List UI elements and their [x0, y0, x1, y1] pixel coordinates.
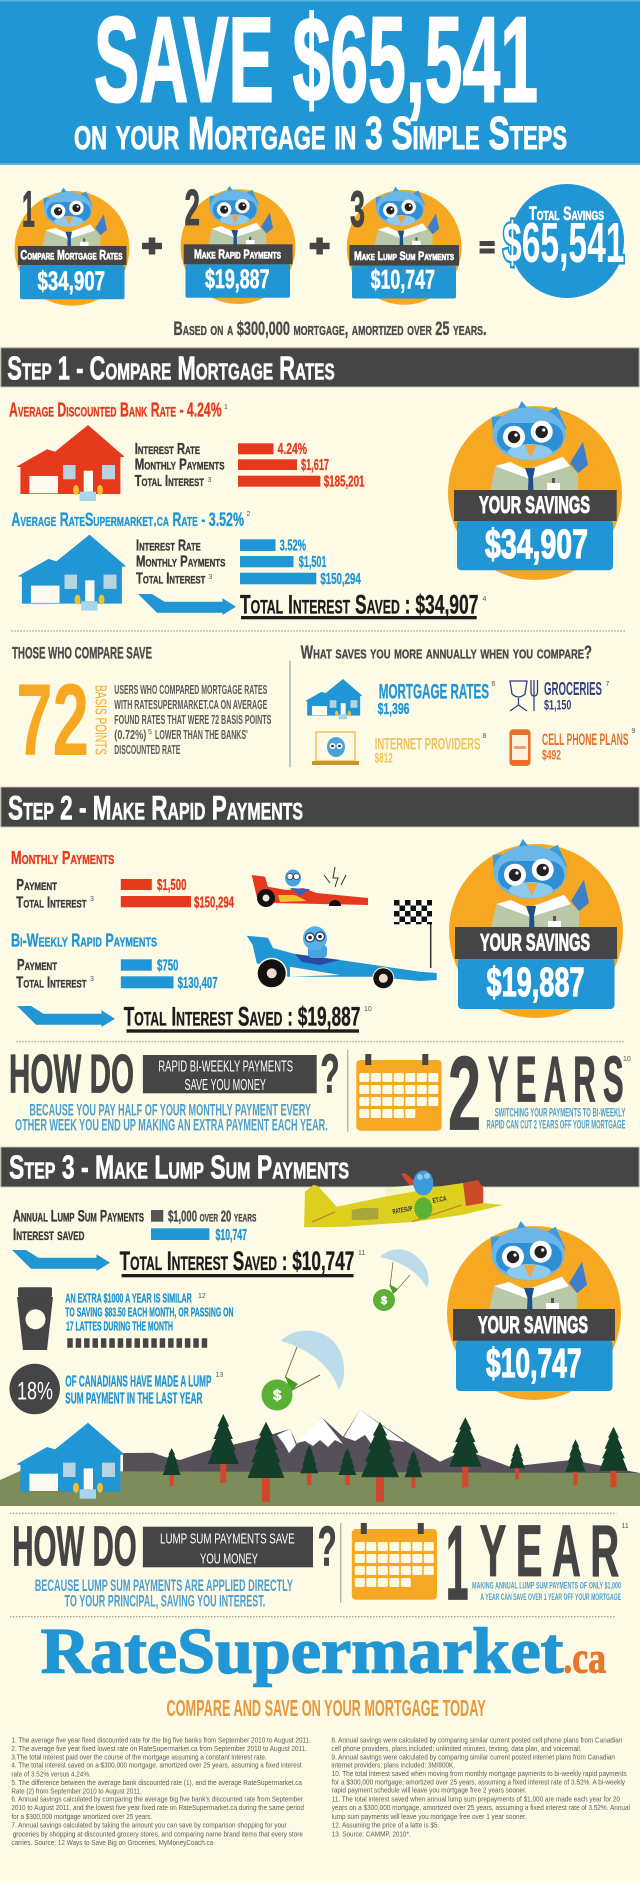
explanation: BECAUSE LUMP SUM PAYMENTS ARE APPLIED DIRECTLY — [35, 1576, 293, 1595]
footnotes right column: cell phone providers, plans included: unlimited minutes, texting, data plan, and voicemail. — [331, 1744, 582, 1753]
latte text — [65, 1291, 234, 1334]
RateSupermarket bars — [240, 538, 361, 588]
arrow — [17, 1006, 115, 1027]
step badge 2: Make Rapid Payments — [194, 246, 281, 261]
internet providers item: 8 — [482, 733, 486, 740]
latte text: 17 LATTES DURING THE MONTH — [66, 1319, 173, 1334]
one year panel: 1 — [446, 1502, 469, 1622]
internet providers item: INTERNET PROVIDERS — [375, 734, 480, 753]
two years panel: 10 — [623, 1056, 631, 1063]
total interest saved step 3 — [120, 1246, 365, 1277]
icon: red house — [16, 425, 124, 501]
groceries item: 7 — [606, 681, 610, 688]
total savings circle — [503, 184, 624, 298]
bank rate bars: 4.24% — [278, 441, 307, 458]
step 3 heading bar: Step 3 - Make Lump Sum Payments — [9, 1148, 349, 1185]
bank rate labels — [135, 441, 224, 490]
bars — [121, 958, 218, 992]
logo: .ca — [563, 1634, 606, 1683]
paragraph: LOWER THAN THE BANKS' — [155, 728, 248, 742]
lump sum stats: $1,000 over 20 years — [168, 1209, 256, 1226]
step badge 1 — [15, 181, 129, 306]
two years panel — [356, 1035, 631, 1152]
footnote mark: 2 — [246, 511, 250, 518]
RateSupermarket labels: Monthly Payments — [136, 554, 225, 571]
total interest saved step 1: Total Interest Saved : $34,907 — [240, 589, 478, 619]
latte text: TO SAVING $83.50 EACH MONTH, OR PASSING ON — [65, 1305, 234, 1320]
plus sign — [310, 238, 330, 254]
dark box — [143, 1055, 317, 1093]
step badge 1: Compare Mortgage Rates — [20, 247, 122, 262]
labels: 3 — [90, 896, 94, 903]
total interest saved step 3: 11 — [358, 1250, 365, 1257]
mortgage rates item: MORTGAGE RATES — [379, 680, 489, 703]
18 percent stat: OF CANADIANS HAVE MADE A LUMP — [65, 1374, 212, 1391]
equals sign — [480, 244, 495, 251]
small parachute with money bag: $ — [381, 1295, 387, 1307]
labels: 3 — [90, 976, 94, 983]
bars: $130,407 — [178, 975, 218, 992]
step badge 3: Make Lump Sum Payments — [354, 249, 455, 263]
paragraph: USERS WHO COMPARED MORTGAGE RATES — [114, 683, 267, 697]
total interest saved step 2: 10 — [364, 1006, 372, 1013]
step badge 1: 1 — [22, 181, 35, 238]
step badge 2: 2 — [184, 179, 200, 236]
icon: checkered flag — [394, 900, 432, 968]
step badge 2 — [181, 179, 295, 304]
step 2 heading bar — [1, 787, 639, 827]
large parachute with money bag: $ — [273, 1387, 282, 1404]
icon: calendar — [352, 1523, 437, 1600]
cell phone plans item — [509, 728, 636, 766]
monthly payments panel — [11, 848, 234, 912]
labels: Total Interest — [16, 895, 87, 912]
trees — [163, 1414, 628, 1502]
internet providers item — [312, 732, 486, 766]
one year panel — [352, 1502, 629, 1622]
18 percent stat: SUM PAYMENT IN THE LAST YEAR — [65, 1390, 203, 1407]
bi-weekly heading: Bi-Weekly Rapid Payments — [11, 931, 157, 951]
RateSupermarket labels: Interest Rate — [136, 538, 201, 555]
icon: yellow plane: RATESUP — [392, 1206, 413, 1216]
labels: Payment — [17, 957, 57, 974]
step badge 3: 3 — [350, 181, 365, 238]
paragraph: 5 — [148, 729, 152, 736]
icon: yellow plane — [304, 1170, 503, 1227]
18 percent stat: 13 — [216, 1372, 223, 1379]
bars: $1,500 — [157, 877, 187, 894]
ground — [0, 1471, 640, 1506]
bank rate labels: Total Interest — [135, 473, 204, 490]
how do panel: lump sum — [12, 1515, 337, 1611]
icon: calendar — [356, 1054, 442, 1131]
large parachute with money bag — [262, 1331, 344, 1410]
step 2 heading bar: Step 2 - Make Rapid Payments — [8, 789, 303, 827]
icon: blue house — [18, 535, 126, 611]
those who compare save panel — [12, 643, 271, 777]
question mark: ? — [318, 1515, 337, 1579]
your savings step 1: $34,907 — [485, 521, 588, 567]
icon: red race car — [252, 867, 368, 907]
footnotes right column: lump sum payments will leave you mortgage free over 1 year sooner. — [332, 1812, 527, 1821]
18 percent stat: 18% — [17, 1377, 53, 1405]
latte text: 12 — [198, 1293, 206, 1300]
footnotes left column: carries. Source: 12 Ways to Save Big on Groceries, MyMoneyCoach.ca — [11, 1838, 213, 1847]
lump sum stats — [13, 1207, 256, 1244]
bank rate bars: $185,201 — [324, 474, 365, 490]
footnotes left column: 3.The total interest paid over the course of the mortgage assuming a constant interest rate. — [11, 1752, 267, 1761]
footnotes left column: 5. The difference between the average bank discounted rate (1), and the average RateSupermarket.ca — [11, 1778, 302, 1787]
snow caps — [277, 1410, 405, 1453]
paragraph: DISCOUNTED RATE — [114, 743, 180, 757]
18 percent stat — [9, 1364, 223, 1414]
icon: blue house — [16, 1423, 124, 1499]
paragraph — [114, 683, 271, 757]
footnotes right column: 13. Source: CAMMP, 2010*. — [332, 1829, 411, 1838]
RateSupermarket bars: $150,294 — [320, 571, 361, 588]
footnotes left column: 6. Annual savings calculated by comparing the average big five bank's discounted rate from September — [11, 1795, 304, 1804]
mortgage rates item: 6 — [492, 681, 496, 688]
how do text: HOW DO — [12, 1515, 137, 1579]
bank rate bars: $1,617 — [301, 457, 329, 474]
footnotes right column: 12. Assuming the price of a latte is $5. — [332, 1821, 439, 1830]
how do panel: bi-weekly: RAPID BI-WEEKLY PAYMENTS — [158, 1059, 293, 1076]
footnotes left column: 4. The total interest saved on a $300,000 mortgage, amortized over 25 years, assuming a fixed interest — [11, 1761, 302, 1770]
total interest saved step 2 — [124, 1001, 372, 1033]
step badge 3 — [347, 181, 462, 305]
RateSupermarket labels — [136, 538, 225, 587]
monthly heading: Monthly Payments — [11, 848, 115, 868]
plus sign — [142, 238, 162, 254]
logo: RateSupermarket — [41, 1616, 564, 1688]
footnotes left column: 7. Annual savings calculated by taking the amount you can save by comparison shopping for your — [11, 1821, 287, 1830]
bank rate labels: 3 — [208, 477, 212, 484]
how do panel: lump sum: LUMP SUM PAYMENTS SAVE — [160, 1530, 295, 1547]
footnotes left column: for a $300,000 mortgage amortized over 25 years. — [11, 1812, 152, 1821]
total interest saved step 3: Total Interest Saved : $10,747 — [120, 1246, 354, 1276]
footnotes right column: internet providers, plans included: 3M/800K. — [331, 1761, 455, 1770]
latte text: AN EXTRA $1000 A YEAR IS SIMILAR — [65, 1291, 192, 1306]
mortgage rates item — [305, 679, 496, 719]
RateSupermarket rate panel — [11, 510, 361, 611]
your savings step 3 — [447, 1221, 621, 1400]
labels — [16, 877, 94, 912]
heading: THOSE WHO COMPARE SAVE — [12, 643, 152, 662]
bank rate bars — [238, 441, 365, 490]
footnotes left column — [11, 1736, 311, 1847]
footnotes left column: rate of 3.52% versus 4.24%. — [11, 1770, 91, 1778]
groceries item: $1,150 — [544, 696, 572, 712]
basis note: Based on a $300,000 mortgage, amortized over 25 years. — [174, 319, 486, 340]
explanation: BECAUSE YOU PAY HALF OF YOUR MONTHLY PAYMENT EVERY — [29, 1101, 311, 1120]
bank rate labels: Monthly Payments — [135, 456, 224, 474]
labels: Total Interest — [16, 975, 87, 992]
lump sum stats: $10,747 — [216, 1227, 247, 1244]
number 2: 2 — [448, 1035, 481, 1152]
bars: $150,294 — [194, 894, 234, 912]
RateSupermarket bars: $1,501 — [299, 554, 327, 571]
vertical label: BASIS POINTS — [92, 685, 108, 755]
big number: 72 — [16, 663, 89, 777]
cell phone plans item: $492 — [542, 746, 561, 762]
dark box — [143, 1527, 313, 1567]
arrow — [138, 594, 236, 615]
year: YEAR — [480, 1512, 619, 1592]
RateSupermarket labels: Total Interest — [136, 570, 205, 587]
RateSupermarket bars: 3.52% — [280, 538, 306, 555]
your savings step 2 — [449, 839, 623, 1018]
bank rate panel — [9, 400, 365, 501]
footnotes right column — [331, 1736, 630, 1838]
step 1 heading bar: Step 1 - Compare Mortgage Rates — [7, 349, 335, 386]
header banner — [0, 0, 640, 165]
years: YEARS — [488, 1043, 624, 1116]
icon: coffee cup — [17, 1287, 53, 1350]
total interest saved step 1: 4 — [482, 596, 486, 603]
paragraph: WITH RATESUPERMARKET.CA ON AVERAGE — [114, 698, 267, 712]
internet providers item: $812 — [375, 750, 393, 766]
how do panel: lump sum: YOU MONEY — [200, 1550, 258, 1567]
lump sum stats: Interest saved — [13, 1225, 85, 1244]
annual savings panel — [301, 642, 636, 766]
paragraph: (0.72%) — [114, 728, 146, 742]
groceries item — [510, 679, 610, 712]
one year panel: 11 — [622, 1523, 629, 1530]
mountains — [123, 1410, 640, 1485]
footnotes left column: 2. The average five year fixed lowest rate on RateSupermarket.ca from September 2010 to August 2011. — [11, 1744, 307, 1753]
RateSupermarket heading: Average RateSupermarket.ca Rate - 3.52% — [11, 510, 244, 531]
landscape scene — [0, 1410, 640, 1506]
step badge 1: $34,907 — [38, 266, 105, 296]
small parachute with money bag — [373, 1249, 429, 1311]
bank rate labels: Interest Rate — [135, 441, 200, 458]
footnote mark: 1 — [224, 404, 228, 411]
question mark: ? — [320, 1043, 340, 1105]
RateSupermarket labels: 3 — [208, 574, 212, 581]
lump sum stats: Annual Lump Sum Payments — [13, 1207, 144, 1226]
bank rate heading: Average Discounted Bank Rate - 4.24% — [9, 400, 222, 422]
labels: Payment — [16, 877, 57, 894]
paragraph: FOUND RATES THAT WERE 72 BASIS POINTS — [114, 713, 271, 727]
bars — [121, 877, 234, 912]
cell phone plans item: 9 — [632, 728, 636, 735]
total savings circle: Total Savings — [529, 204, 604, 225]
how do panel: lump sum: TO YOUR PRINCIPAL, SAVING YOU INTEREST. — [64, 1592, 265, 1611]
labels — [16, 957, 94, 992]
icon: yellow plane: ET.CA — [432, 1196, 447, 1205]
mortgage rates item: $1,396 — [378, 701, 409, 718]
arrow — [12, 1250, 110, 1271]
bi-weekly panel — [11, 931, 218, 992]
footnotes left column: groceries by shopping at discounted grocery stores, and comparing name brand items that every store — [13, 1829, 303, 1838]
bars: $750 — [157, 958, 178, 974]
how do panel: bi-weekly — [9, 1043, 340, 1135]
your savings step 3: $10,747 — [486, 1340, 582, 1386]
step badge 3: $10,747 — [371, 264, 435, 294]
seventeen cups — [67, 1338, 207, 1348]
your savings step 2: $19,887 — [486, 959, 584, 1005]
icon: blue race car — [247, 926, 437, 989]
footnotes left column: 1. The average five year fixed discounted rate for the big five banks from September 2010 to August 2011. — [11, 1736, 311, 1744]
footnotes left column: Rate (2) from September 2010 to August 2011. — [11, 1786, 142, 1795]
your savings step 1 — [448, 401, 622, 580]
how do text: HOW DO — [9, 1043, 134, 1105]
how do panel: bi-weekly: OTHER WEEK YOU END UP MAKING AN EXTRA PAYMENT EACH YEAR. — [15, 1116, 328, 1135]
total interest saved step 1 — [240, 589, 486, 619]
step badge 2: $19,887 — [205, 264, 270, 294]
how do panel: bi-weekly: SAVE YOU MONEY — [184, 1077, 266, 1094]
footnotes right column: rapid payment schedule will leave you mortgage free 2 years sooner. — [332, 1786, 527, 1795]
footnotes left column: 2010 to August 2011, and the lowest five year fixed rate on RateSupermarket.ca during the same period — [11, 1803, 304, 1812]
total interest saved step 2: Total Interest Saved : $19,887 — [124, 1001, 360, 1031]
